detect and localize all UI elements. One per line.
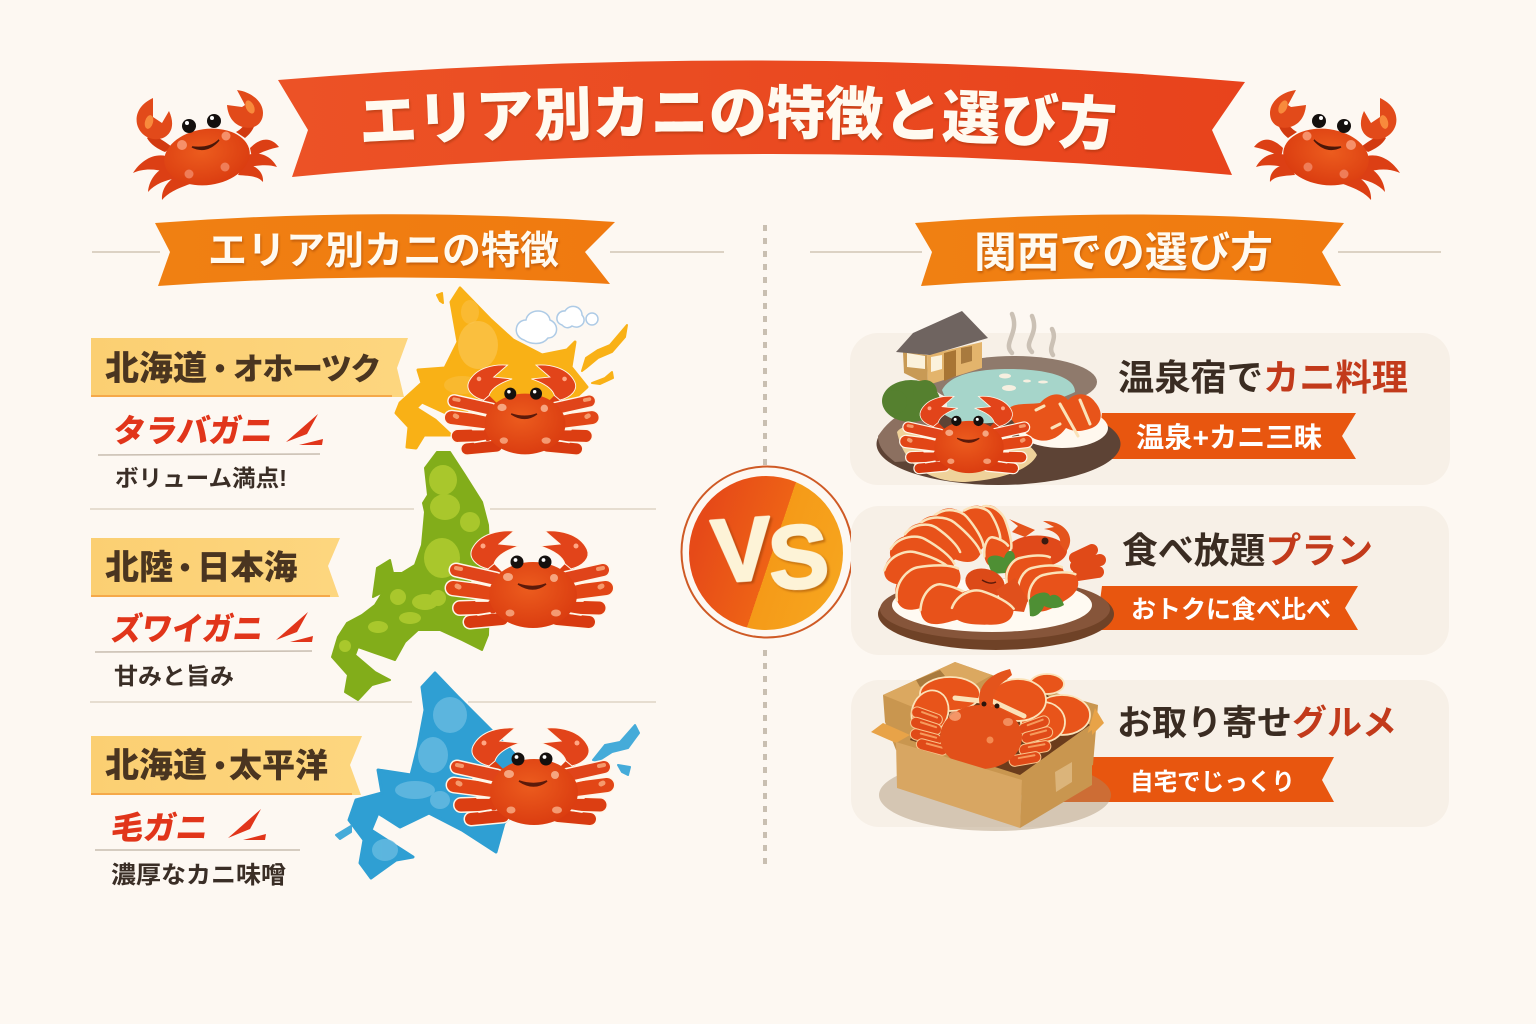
VS badge: S bbox=[765, 506, 832, 610]
area row: Pacific bbox=[91, 736, 362, 889]
card: onsen bbox=[850, 311, 1450, 485]
icon: crab on yellow map bbox=[451, 365, 592, 454]
title ribbon bbox=[278, 60, 1245, 177]
ribbon: 温泉+カニ三昧 bbox=[1136, 422, 1322, 453]
label: Okhotsk: オホーツク bbox=[233, 352, 380, 387]
crab name: ズワイガニ: ズワイガニ bbox=[109, 611, 266, 647]
title text: エリア別カニの特徴と選び方 bbox=[363, 84, 1117, 152]
description: 濃厚なカニ味噌 bbox=[111, 862, 286, 889]
panel: area characteristics bbox=[90, 214, 724, 889]
section heading ribbon: left bbox=[155, 214, 615, 286]
icon: crab left of title bbox=[133, 90, 279, 200]
section heading ribbon: right: 関西での選び方 bbox=[974, 229, 1273, 276]
label: Okhotsk bbox=[91, 338, 408, 397]
map: Hokkaido yellow bbox=[396, 288, 627, 448]
ribbon bbox=[1056, 757, 1334, 802]
area row: Okhotsk bbox=[91, 338, 408, 491]
accent slashes bbox=[286, 414, 323, 445]
VS badge bbox=[682, 466, 852, 638]
icon: clouds bbox=[516, 306, 598, 344]
accent slashes bbox=[228, 809, 266, 840]
label: Pacific bbox=[91, 736, 362, 795]
ribbon: おトクに食べ比べ bbox=[1131, 596, 1331, 624]
card title: 温泉宿でカニ料理 bbox=[1118, 357, 1408, 398]
section heading ribbon: left: エリア別カニの特徴 bbox=[208, 230, 559, 273]
label: Hokuriku bbox=[91, 538, 340, 597]
area row: Hokuriku bbox=[91, 538, 340, 689]
label: Hokuriku: 北陸 bbox=[105, 549, 173, 587]
icon: crab on green map bbox=[453, 531, 606, 628]
label: Pacific: 北海道 bbox=[105, 747, 207, 785]
crab name: 毛ガニ: 毛ガニ bbox=[109, 810, 211, 846]
crab name: タラバガニ: タラバガニ bbox=[111, 413, 276, 449]
illustration: onsen and crab platter bbox=[876, 311, 1120, 485]
icon: crab on blue map bbox=[454, 728, 607, 825]
illustration: crab platter bbox=[878, 498, 1114, 650]
label: Hokuriku: 日本海 bbox=[197, 550, 298, 587]
panel: how to choose in Kansai bbox=[810, 214, 1450, 831]
card: mail order bbox=[851, 662, 1449, 831]
label: Okhotsk: 北海道 bbox=[105, 350, 207, 388]
card: all-you-can-eat bbox=[851, 498, 1449, 655]
description: 甘みと旨み bbox=[114, 663, 234, 689]
map: Hokkaido blue bbox=[336, 673, 639, 878]
label: Pacific: ・ bbox=[205, 751, 235, 784]
ribbon: 自宅でじっくり bbox=[1130, 769, 1295, 796]
VS badge: V bbox=[708, 499, 775, 603]
section heading ribbon: right bbox=[915, 214, 1344, 286]
card title: 食べ放題プラン bbox=[1122, 530, 1373, 571]
illustration: crab in box bbox=[871, 662, 1111, 831]
icon: crab right of title bbox=[1254, 90, 1400, 200]
label: Okhotsk: ・ bbox=[205, 354, 235, 387]
ribbon bbox=[1096, 586, 1358, 630]
description: ボリューム満点! bbox=[115, 465, 287, 491]
label: Hokuriku: ・ bbox=[170, 553, 200, 586]
card title: お取り寄せグルメ bbox=[1117, 704, 1397, 743]
label: Pacific: 太平洋 bbox=[229, 747, 328, 784]
accent slashes bbox=[276, 612, 313, 642]
ribbon bbox=[1096, 413, 1356, 459]
map: Hokuriku green bbox=[332, 452, 490, 700]
